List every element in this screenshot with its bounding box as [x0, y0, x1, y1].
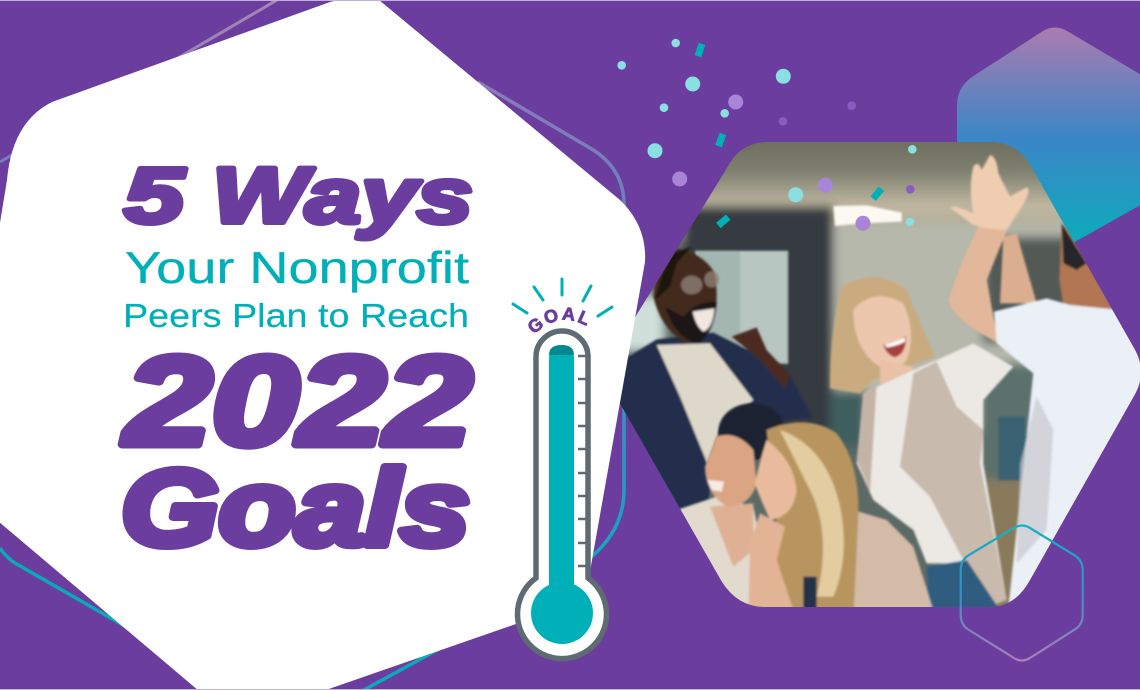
title line: Peers Plan to Reach: Peers Plan to Reach	[123, 298, 469, 335]
outline: lower right line	[362, 643, 450, 690]
man in blazer	[607, 247, 813, 527]
photo background	[620, 142, 1140, 607]
man high-fiving	[948, 155, 1140, 623]
title	[121, 150, 473, 568]
lavender dots	[672, 94, 870, 231]
outline: right curved line	[478, 82, 624, 558]
thermometer glass	[518, 331, 606, 659]
teal strips	[695, 43, 884, 228]
thermometer fluid	[531, 345, 593, 644]
confetti	[617, 39, 917, 231]
goal rays	[513, 279, 612, 316]
outline hexagon lower right	[961, 526, 1083, 660]
goal label: GOAL	[528, 307, 588, 332]
outline: upper left line	[0, 0, 277, 162]
light teal dots	[617, 39, 917, 226]
photo: team celebrating with a high five	[620, 142, 1140, 607]
woman laughing	[830, 277, 1013, 620]
seated women	[677, 403, 937, 620]
thermometer ticks	[578, 356, 586, 566]
title line: 5 Ways: Ways	[212, 150, 473, 240]
title line: 5 Ways	[124, 150, 473, 240]
title line: Goals: Goals	[121, 447, 470, 568]
title line: 5 Ways: 5	[124, 150, 185, 240]
violet dots	[779, 101, 915, 194]
gradient hexagon	[957, 28, 1140, 255]
outline: lower left line	[0, 548, 128, 628]
white hexagon panel	[0, 0, 645, 690]
window and lamp	[695, 205, 1025, 480]
icon: goal thermometer	[511, 278, 614, 662]
title line: Your Nonprofit: Your Nonprofit	[125, 244, 470, 293]
title line: 2022: 2022	[123, 330, 472, 472]
